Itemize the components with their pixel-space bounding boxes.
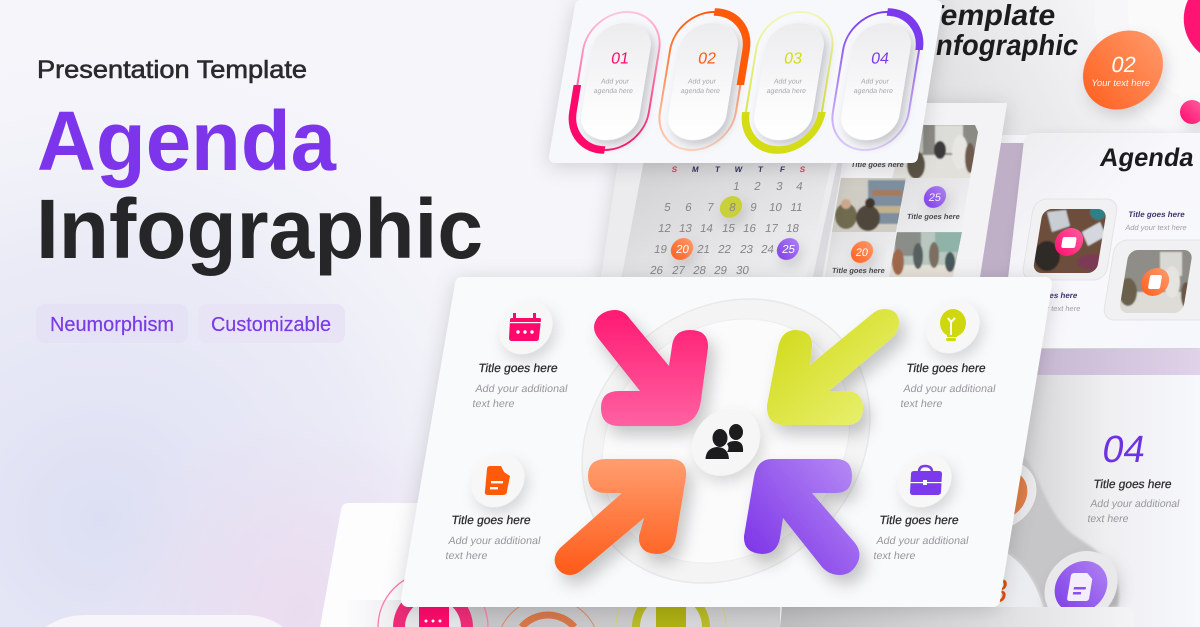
text: top left body: text here <box>472 398 516 410</box>
calendar dates: 3 <box>775 181 784 193</box>
photo cell: team at window <box>892 125 978 178</box>
bottom node yellow <box>616 572 726 627</box>
agenda pill 03 <box>740 12 838 150</box>
calendar dates: 14 <box>699 223 714 235</box>
heading: infographic: Infographic <box>36 182 483 276</box>
slide title line two: Infographic <box>926 30 1081 62</box>
calendar dates: 20 <box>675 244 690 256</box>
calendar dates: 25 <box>781 244 796 256</box>
calendar dates: 12 <box>657 223 672 235</box>
calendar dates: 10 <box>768 202 783 214</box>
agenda pill 03: 03 <box>783 50 804 67</box>
agenda pill 01 <box>567 12 665 150</box>
text: top right title: Title goes here <box>906 361 987 375</box>
panel: top agenda pills <box>555 6 936 157</box>
agenda pill 01: 01 <box>610 50 631 67</box>
agenda pill 03: Add your <box>773 79 803 85</box>
calendar weekday header <box>671 165 806 174</box>
calendar dates: 1 <box>732 181 741 193</box>
arrow: orange <box>555 459 686 575</box>
calendar weekday header: W <box>734 165 743 174</box>
text: bottom right body <box>873 535 969 562</box>
panel: calendar slide <box>600 150 840 285</box>
calendar dates: 8 <box>728 202 737 214</box>
text: top left title: Title goes here <box>478 361 559 375</box>
cell: 20: 20 <box>855 247 869 259</box>
tile one subtext: Add your text here <box>1125 223 1187 232</box>
orange ball 02 <box>1077 30 1169 110</box>
bottom white pill shape <box>45 615 283 627</box>
icon circle: light bulb <box>923 301 983 353</box>
text: bottom left title: Title goes here <box>451 513 532 527</box>
date highlight: 20 <box>669 238 695 260</box>
arrow: yellow <box>767 309 899 425</box>
text: top left body <box>472 383 568 410</box>
bottom node pink <box>378 572 488 627</box>
center hub with people icon <box>687 408 765 476</box>
text: bottom right body: Add your additional <box>876 535 969 547</box>
calendar dates: 7 <box>706 202 715 214</box>
calendar dates: 26 <box>649 265 664 277</box>
agenda pill 02: Add your <box>687 79 717 85</box>
calendar dates: 11 <box>790 202 803 214</box>
calendar dates: 28 <box>692 265 707 277</box>
caption above photo grid: Title goes here <box>850 160 905 169</box>
calendar weekday header: S <box>799 165 806 174</box>
neumorphic ring <box>561 299 891 583</box>
orange node behind panel <box>962 461 1042 529</box>
calendar dates: 17 <box>764 223 779 235</box>
panel: bottom left slide <box>320 503 780 627</box>
agenda pill 02: 02 <box>697 50 718 67</box>
tile one caption: Title goes here <box>1128 210 1186 219</box>
calendar dates <box>649 181 804 277</box>
calendar weekday header: T <box>757 165 764 174</box>
date highlight: 25 <box>775 238 801 260</box>
text: top right body <box>900 383 996 410</box>
calendar dates: 13 <box>678 223 693 235</box>
calendar dates: 24 <box>760 244 775 256</box>
agenda pill 04: agenda here <box>853 88 894 95</box>
text: top right body: text here <box>900 398 944 410</box>
cell: 20 <box>825 232 896 277</box>
tag: neumorphism <box>36 304 188 343</box>
tag: customizable <box>198 304 345 343</box>
heading: agenda: Agenda <box>37 94 337 188</box>
calendar dates: 9 <box>749 202 758 214</box>
body text line one: Add your additional <box>1090 498 1180 510</box>
image tile one <box>1021 199 1119 280</box>
agenda pill 03: agenda here <box>766 88 807 95</box>
panel: bottom right slide <box>780 607 1134 627</box>
panel: main arrows slide <box>408 284 1045 600</box>
calendar dates: 5 <box>663 202 672 214</box>
text: bottom left body: text here <box>445 550 489 562</box>
calendar weekday header: T <box>714 165 721 174</box>
calendar dates: 2 <box>753 181 762 193</box>
calendar dates: 27 <box>671 265 686 277</box>
icon circle: briefcase <box>895 455 955 507</box>
text: bottom left body <box>445 535 541 562</box>
body text line two: text here <box>1087 513 1130 525</box>
calendar dates: 30 <box>735 265 750 277</box>
photo cell: meeting handshake <box>889 232 962 277</box>
icon circle: calendar <box>496 302 556 354</box>
calendar weekday header: M <box>691 165 700 174</box>
calendar dates: 21 <box>696 244 711 256</box>
text: bottom left body: Add your additional <box>448 535 541 547</box>
calendar dates: 4 <box>795 181 804 193</box>
calendar dates: 18 <box>785 223 800 235</box>
panel: top right template slide <box>900 0 1200 145</box>
calendar dates: 23 <box>739 244 754 256</box>
photo cell: library group <box>832 178 906 232</box>
title text: Title goes here <box>1093 477 1173 491</box>
partial number 03: 03 <box>968 573 1011 610</box>
inner light disc <box>1128 0 1200 105</box>
lower white region <box>990 545 1043 607</box>
calendar dates: 16 <box>742 223 757 235</box>
arrow: purple <box>744 459 859 575</box>
calendar dates: 29 <box>713 265 728 277</box>
image tile two <box>1102 240 1200 320</box>
agenda pill 04 <box>827 12 925 150</box>
tag: customizable: Customizable <box>211 314 331 336</box>
large pink ball <box>1184 0 1200 53</box>
icon circle: document <box>468 455 528 507</box>
tile two subtext: Add your text here <box>1018 304 1081 313</box>
calendar weekday header: F <box>779 165 786 174</box>
lavender band <box>978 143 1060 290</box>
text: top left body: Add your additional <box>475 383 568 395</box>
calendar dates: 6 <box>684 202 693 214</box>
tag: neumorphism: Neumorphism <box>50 314 174 336</box>
heading: presentation template: Presentation Template <box>37 56 307 84</box>
cell: 20: Title goes here <box>831 266 886 275</box>
arrow: pink <box>594 310 708 426</box>
agenda pill 02: agenda here <box>680 88 721 95</box>
panel: agenda list slide <box>978 133 1200 348</box>
agenda pill 02 <box>654 12 752 150</box>
connector blob <box>990 445 1119 607</box>
agenda pill 01: agenda here <box>593 88 634 95</box>
purple node <box>1039 551 1123 623</box>
cell: 25 <box>897 178 970 232</box>
lavender band <box>1000 349 1200 375</box>
text: bottom right body: text here <box>873 550 917 562</box>
calendar dates: 22 <box>717 244 732 256</box>
agenda pill 04: 04 <box>870 50 891 67</box>
cell: 25: 25 <box>928 192 942 204</box>
bottom node orange <box>501 598 595 627</box>
tile two caption: Title goes here <box>1020 291 1079 300</box>
slide title: Template <box>922 0 1058 32</box>
cell: 25: Title goes here <box>906 212 961 221</box>
orange ball 02: 02 <box>1110 52 1138 77</box>
orange ball 02: Your text here <box>1091 78 1151 89</box>
date highlight: 8 <box>718 196 744 218</box>
panel: photo grid slide <box>820 103 1007 290</box>
calendar dates: 19 <box>653 244 668 256</box>
agenda pill 04: Add your <box>860 79 890 85</box>
outer faint disc <box>1095 0 1200 145</box>
number 04: 04 <box>1099 428 1149 471</box>
text: top right body: Add your additional <box>903 383 996 395</box>
panel: lower right 04 slide <box>962 349 1200 627</box>
text: bottom right title: Title goes here <box>879 513 960 527</box>
calendar weekday header: S <box>671 165 678 174</box>
small pink ball <box>1180 100 1200 124</box>
agenda pill 01: Add your <box>600 79 630 85</box>
calendar dates: 15 <box>721 223 736 235</box>
